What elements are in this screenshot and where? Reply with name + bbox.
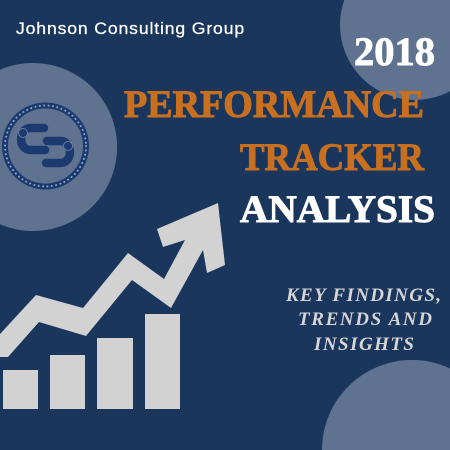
bar 1 [3,370,38,409]
bar 2 [50,355,85,409]
bar chart [3,314,180,409]
subtitle line 1: KEY FINDINGS, [285,285,441,306]
logo right link [46,141,70,163]
logo: linked chain emblem [5,106,86,186]
title: tracker: TRACKER [240,136,425,179]
circle: top right [340,0,450,100]
logo right link eye [64,142,72,150]
logo left link [21,128,45,150]
company name: Johnson Consulting Group [16,20,245,38]
subtitle line 3: INSIGHTS [313,334,414,355]
logo ring [5,106,86,186]
logo ring dots [5,106,86,186]
circle: left, behind logo [0,63,117,231]
circle: bottom right [322,360,450,450]
title: performance: PERFORMANCE [124,83,424,126]
subtitle line 2: TRENDS AND [298,309,432,330]
bar 3 [97,338,133,409]
icon: rising arrow [0,203,225,357]
year heading: 2018 [354,29,435,74]
logo left link eye [18,128,28,138]
title: analysis: ANALYSIS [240,188,435,231]
bar 4 [145,314,180,409]
subtitle [285,285,441,355]
